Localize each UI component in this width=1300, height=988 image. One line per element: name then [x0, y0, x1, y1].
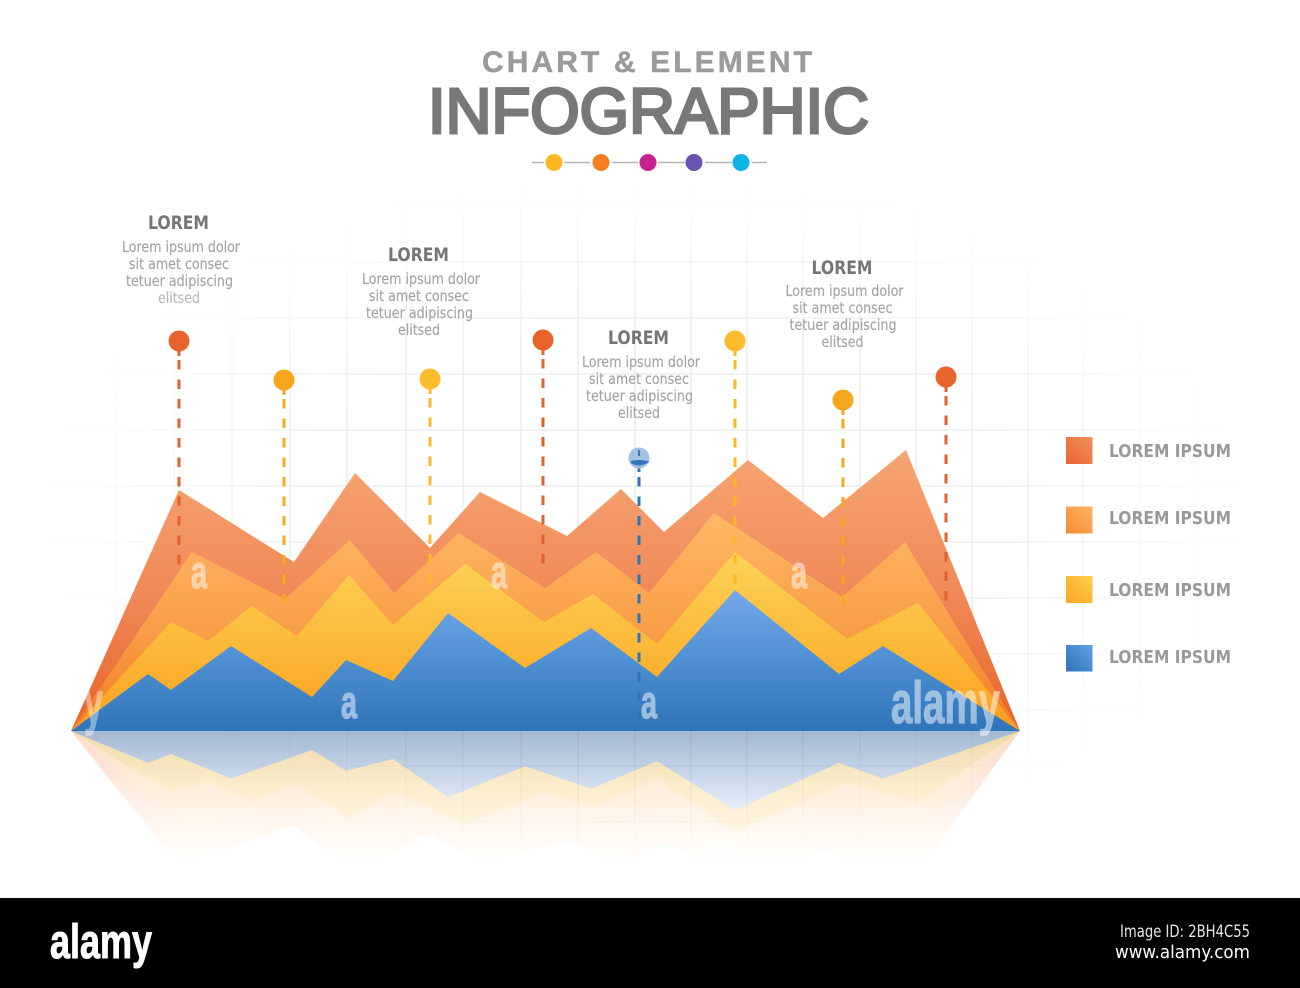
- area layer 1: dark orange: [71, 450, 1020, 731]
- legend: [1066, 437, 1231, 672]
- background grid: [142, 231, 1148, 810]
- watermarks: [84, 546, 1000, 736]
- text block 4: Lorem ipsum dolor: [786, 283, 904, 300]
- text block 2: [362, 245, 481, 339]
- area layer 3: yellow: [71, 552, 1020, 731]
- marker 6: [724, 330, 746, 592]
- marker 3: [420, 368, 440, 592]
- marker 2: [274, 370, 294, 602]
- text block 3: LOREM: [608, 328, 669, 349]
- footer url: www.alamy.com: [1115, 942, 1250, 963]
- text block 1: Lorem ipsum dolor: [122, 239, 241, 256]
- chart reflection: [71, 731, 1020, 888]
- area layer 4: blue: [71, 590, 1020, 731]
- marker 4: [532, 330, 554, 566]
- text block 4: elitsed: [822, 334, 864, 351]
- text block 3: elitsed: [618, 405, 660, 422]
- text block 2: sit amet consec: [369, 288, 469, 305]
- legend item 4: LOREM IPSUM: [1109, 647, 1231, 668]
- title line 1: CHART & ELEMENT: [482, 46, 812, 79]
- watermarks: a: [791, 546, 807, 598]
- text block 2: tetuer adipiscing: [366, 305, 473, 322]
- text block 4: [786, 258, 904, 351]
- text block 3: [582, 328, 701, 422]
- text block 1: elitsed: [158, 290, 200, 307]
- marker 7: [832, 390, 854, 606]
- watermarks: a: [191, 546, 207, 598]
- text block 4: tetuer adipiscing: [790, 317, 896, 334]
- watermarks: a: [641, 676, 657, 728]
- legend item 2: LOREM IPSUM: [1109, 508, 1231, 529]
- text block 1: sit amet consec: [129, 256, 229, 273]
- watermarks: a: [341, 676, 357, 728]
- legend item 1: [1066, 437, 1231, 464]
- watermarks: y: [84, 670, 103, 736]
- marker 8: [936, 366, 956, 602]
- title: [428, 46, 869, 147]
- text block 1: LOREM: [148, 213, 209, 234]
- legend item 3: [1066, 576, 1231, 603]
- text block 4: LOREM: [812, 258, 872, 279]
- marker 5: [628, 448, 650, 720]
- watermarks: a: [491, 546, 507, 598]
- text block 4: sit amet consec: [792, 300, 892, 317]
- text block 3: sit amet consec: [589, 371, 689, 388]
- title line 2: INFOGRAPHIC: [428, 75, 869, 147]
- text block 2: LOREM: [388, 245, 449, 266]
- text block 1: [122, 213, 241, 307]
- text block 1: tetuer adipiscing: [126, 273, 233, 290]
- marker 1: [168, 330, 190, 566]
- legend item 4: [1066, 645, 1231, 672]
- area layer 2: orange: [71, 513, 1020, 731]
- footer bar: [0, 898, 1300, 988]
- legend item 1: LOREM IPSUM: [1109, 441, 1231, 462]
- footer logo: alamy: [50, 916, 152, 969]
- footer image id: Image ID: 2BH4C55: [1120, 922, 1250, 942]
- text block 2: elitsed: [398, 322, 440, 339]
- text block 3: Lorem ipsum dolor: [582, 354, 701, 371]
- watermarks: alamy: [891, 670, 1000, 736]
- text block 3: tetuer adipiscing: [586, 388, 693, 405]
- area chart: [71, 450, 1020, 731]
- decorative dot row: [532, 154, 767, 171]
- text block 2: Lorem ipsum dolor: [362, 271, 481, 288]
- legend item 3: LOREM IPSUM: [1109, 580, 1231, 601]
- legend item 2: [1066, 506, 1231, 534]
